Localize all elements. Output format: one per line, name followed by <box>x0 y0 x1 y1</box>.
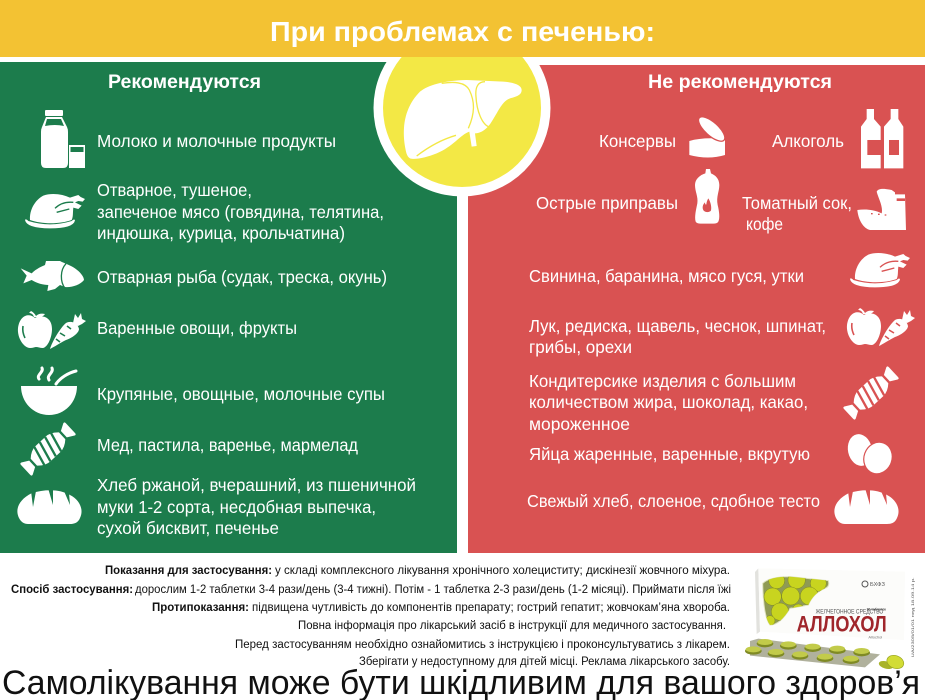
text: sweets: Мед, пастила, варенье, мармелад <box>97 435 358 455</box>
text: bread: муки 1-2 сорта, несдобная выпечка, <box>97 497 376 517</box>
icon: juice carton <box>857 189 906 230</box>
icon: bread <box>834 488 899 524</box>
icon: liver <box>404 80 522 159</box>
product information text: Повна інформація про лікарський засіб в інструкції для медичного застосування. <box>298 620 726 632</box>
heading: recommended: Рекомендуются <box>108 71 261 93</box>
product information text: Зберігати у недоступному для дітей місці. Реклама лікарського засобу. <box>359 656 730 668</box>
title: При проблемах с печенью: <box>270 16 655 47</box>
text: confectionery: мороженное <box>529 414 630 434</box>
title band <box>0 0 925 57</box>
product information text: дорослим 1-2 таблетки 3-4 рази/день (3-4 тижні). Потім - 1 таблетка 2-3 рази/день (1-2 місяці). Приймати після їжі <box>135 584 731 596</box>
text: eggs: Яйца жаренные, варенные, вкрутую <box>529 444 810 464</box>
icon: bottles <box>861 109 903 168</box>
text: confectionery: Кондитерсике изделия с большим <box>529 371 796 391</box>
icon: fish <box>21 261 84 291</box>
product information text: підвищена чутливість до компонентів препарату; гострий гепатит; жовчокам’яна хвороба. <box>252 602 730 614</box>
text: onions etc: Лук, редиска, щавель, чеснок, шпинат, <box>529 316 826 336</box>
product information text <box>11 565 731 668</box>
pack text: Allochol <box>868 635 882 640</box>
pack text: ЖЕЛЧЕГОННОЕ СРЕДСТВО <box>816 608 883 615</box>
text: meat <box>97 180 384 243</box>
icon: soup bowl <box>21 368 77 415</box>
icon: candy <box>841 364 901 422</box>
panel: recommended foods <box>0 62 457 553</box>
icon: eggs <box>845 432 897 478</box>
liver emblem <box>374 20 550 196</box>
text: spices: Острые приправы <box>536 193 678 213</box>
text: fresh bread: Свежый хлеб, слоеное, сдобное тесто <box>527 491 820 511</box>
text: soups: Крупяные, овощные, молочные супы <box>97 384 385 404</box>
text: tomato juice: кофе <box>746 214 783 234</box>
text: canned food: Консервы <box>599 131 676 151</box>
text: tomato juice <box>742 193 852 234</box>
product photo: Allochol pack <box>745 568 915 671</box>
pack text: 30 таблеток <box>867 607 886 612</box>
text: onions etc: грибы, орехи <box>529 337 632 357</box>
liver on pack <box>763 571 829 626</box>
product information text: Протипоказання: <box>152 602 249 614</box>
text: meat: запеченое мясо (говядина, телятина, <box>97 202 384 222</box>
icon: chicken <box>25 194 85 228</box>
icon: can <box>689 113 729 157</box>
blister with tablets <box>745 639 906 671</box>
text: bread: сухой бисквит, печенье <box>97 518 279 538</box>
text: confectionery: количеством жира, шоколад, какао, <box>529 392 808 412</box>
heading: not recommended: Не рекомендуются <box>648 71 832 93</box>
text: alcohol: Алкоголь <box>772 131 844 151</box>
text: confectionery <box>529 371 808 434</box>
icon: bread <box>17 488 82 524</box>
icon: candy <box>18 420 78 478</box>
text: bread <box>97 475 416 538</box>
text: fish: Отварная рыба (судак, треска, окунь) <box>97 267 387 287</box>
text: vegetables: Варенные овощи, фрукты <box>97 318 297 338</box>
icon: milk bottle and glass <box>41 110 85 168</box>
text: tomato juice: Томатный сок, <box>742 193 852 213</box>
text: meat: индюшка, курица, крольчатина) <box>97 223 345 243</box>
icon: sauce bottle <box>695 169 719 224</box>
text: milk: Молоко и молочные продукты <box>97 131 336 151</box>
panel: not recommended foods <box>468 65 925 553</box>
pack text: БХФЗ <box>870 582 885 588</box>
icon: chicken <box>850 253 910 287</box>
text: fatty meat: Свинина, баранина, мясо гуся, утки <box>529 266 804 286</box>
product information text: Перед застосуванням необхідно ознайомитись з інструкцією і проконсультуватись з лікарем. <box>235 639 730 651</box>
icon: apple and carrot <box>18 311 86 349</box>
text: onions etc <box>529 316 826 357</box>
pack text: АЛЛОХОЛ <box>797 611 887 636</box>
product information text: Показання для застосування: <box>105 565 272 577</box>
pack text: UA/2305/01/01 нед 18.09.14 р. <box>911 577 915 657</box>
icon: apple and carrot <box>847 308 915 346</box>
product information text: Спосіб застосування: <box>11 584 133 596</box>
pack text <box>797 577 915 657</box>
text: meat: Отварное, тушеное, <box>97 180 252 200</box>
text: bread: Хлеб ржаной, вчерашний, из пшеничной <box>97 475 416 495</box>
product information text: у складі комплексного лікування хронічного холециститу; дискінезії жовчного міхура. <box>275 565 730 577</box>
